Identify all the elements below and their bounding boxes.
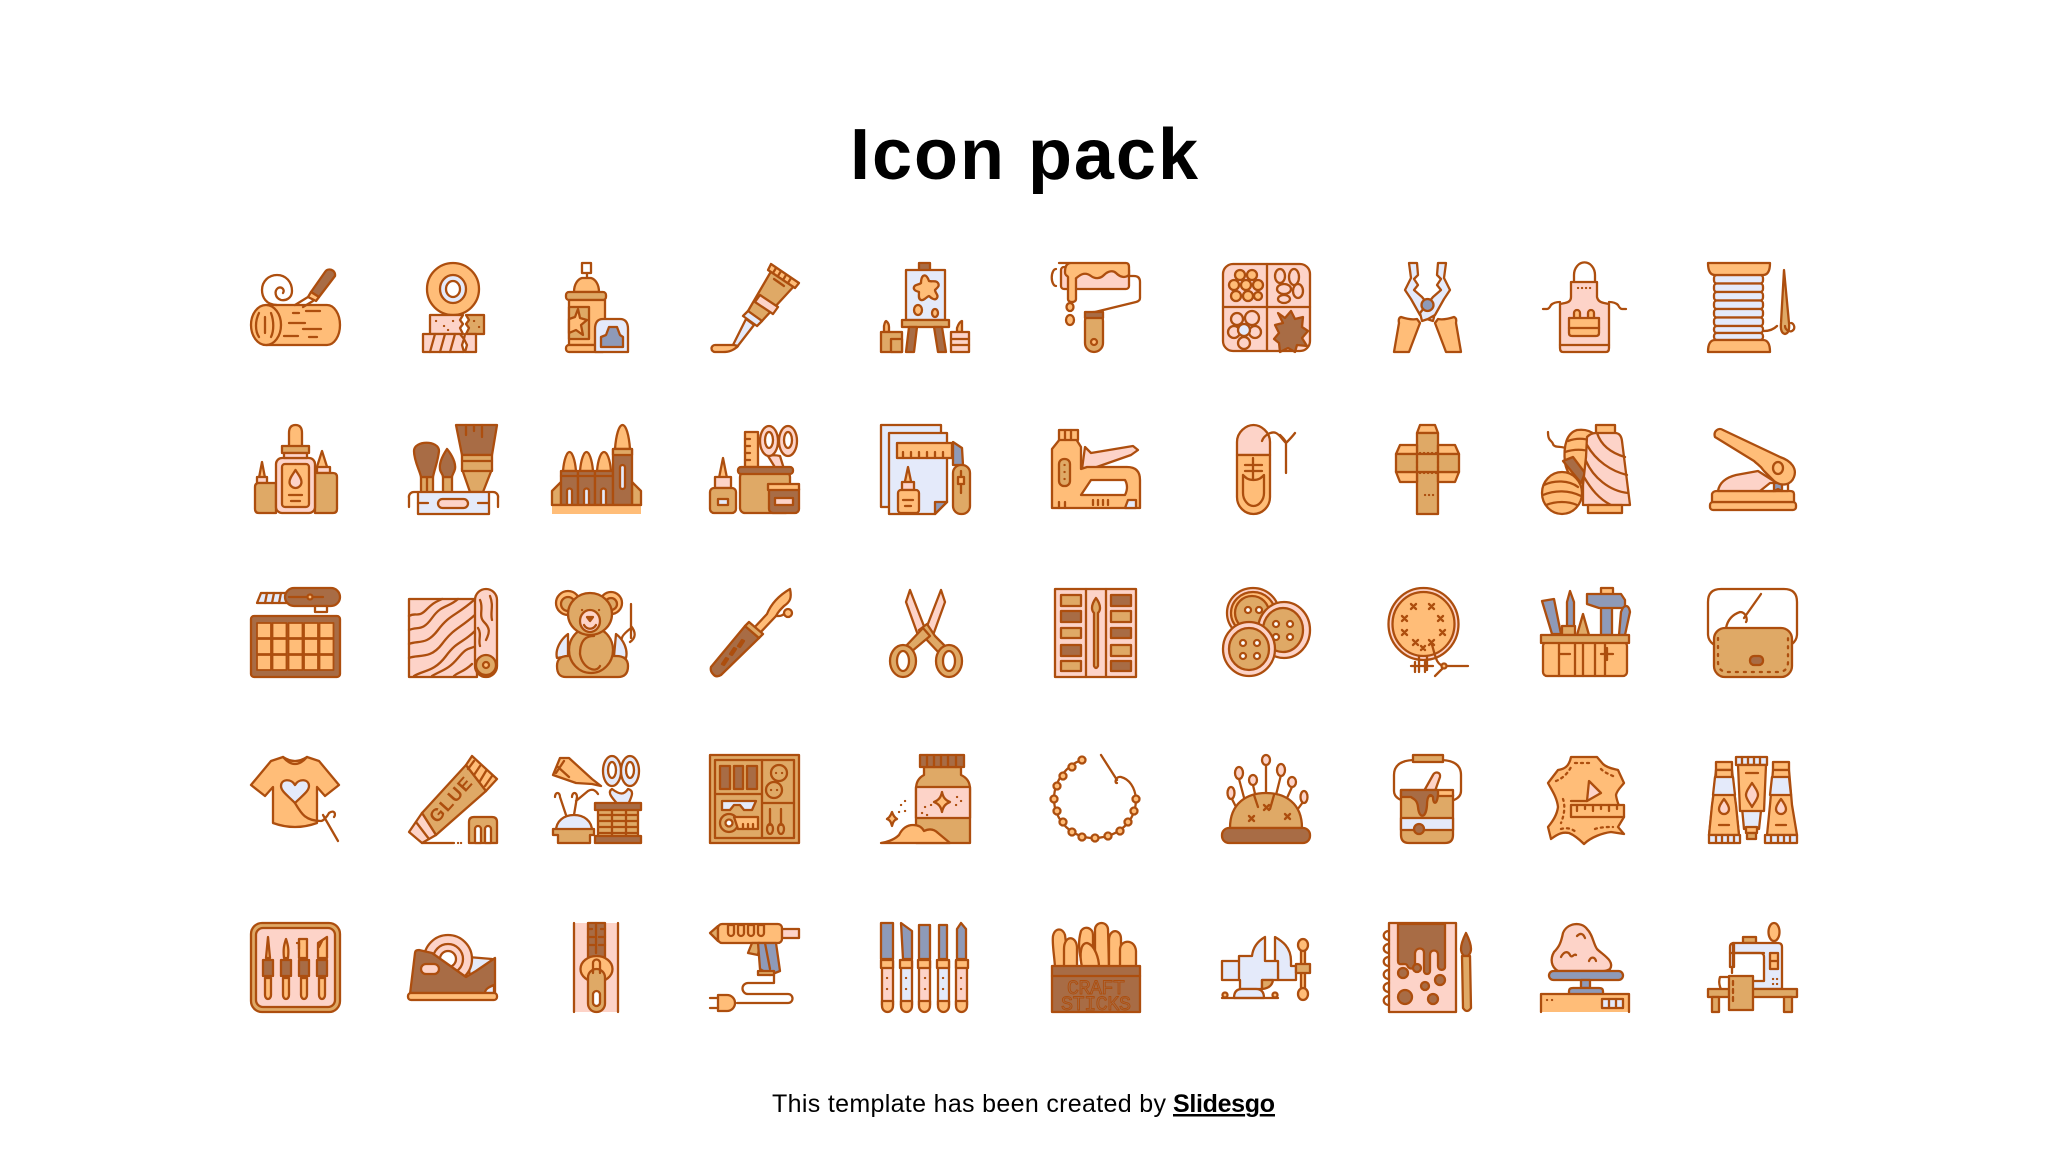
icon: carving chisels — [881, 923, 968, 1012]
icon: shoe and needle — [1237, 425, 1295, 514]
footer credit: This template has been created by — [772, 1090, 1166, 1118]
icon: thread spool and needle — [1708, 263, 1794, 352]
icon: box net — [1396, 425, 1459, 514]
icon: pliers — [1394, 263, 1461, 352]
icon: log with chisel — [251, 269, 340, 345]
icon: craft sticks box: CRAFT — [1067, 978, 1125, 1001]
icon: fabric roll — [409, 589, 497, 677]
icon: paint bucket — [1394, 755, 1461, 843]
footer credit: Slidesgo — [1173, 1090, 1275, 1118]
icon: craft box — [710, 755, 799, 843]
icon: paper and ruler — [881, 425, 970, 514]
icon: cutter and mat — [251, 588, 340, 677]
icon: apron — [1543, 262, 1626, 352]
icon: pottery wheel — [1541, 924, 1629, 1012]
icon: brushes in box — [409, 425, 498, 514]
icon: sewing set — [553, 756, 641, 843]
icon: paint tube — [712, 264, 799, 352]
icon: hole punch — [1710, 429, 1796, 510]
icon: leather bag — [1708, 589, 1797, 677]
icon: bead necklace — [1050, 755, 1140, 842]
icon: brush tray — [251, 923, 340, 1012]
icon: craft sticks box: STICKS — [1061, 994, 1131, 1017]
icon: embroidery hoop — [1388, 588, 1468, 676]
icon grid — [251, 262, 1797, 1017]
icon: glue stick: GLUE — [425, 773, 476, 827]
icon: glue gun — [710, 924, 799, 1011]
icon: craft supplies cup — [710, 426, 799, 513]
icon: leather hide — [1548, 757, 1624, 844]
icon: crayon box — [552, 425, 641, 514]
icon: tape rolls — [423, 263, 484, 352]
icon: notebook and brush — [1384, 923, 1471, 1012]
icon: seam ripper — [711, 589, 792, 676]
icon: glitter jar — [881, 755, 970, 843]
icon: easel — [881, 263, 969, 352]
icon: paint tubes — [1709, 757, 1797, 843]
icon: staple gun — [1052, 430, 1140, 508]
title: Icon pack — [850, 115, 1199, 195]
icon: spray can — [566, 263, 628, 352]
icon: pincushion — [1222, 755, 1310, 843]
icon: zipper — [574, 923, 618, 1012]
icon: glue bottles — [255, 425, 337, 513]
icon: bead tray — [1223, 264, 1310, 352]
icon: sewing machine — [1708, 923, 1797, 1012]
icon: tool caddy — [1541, 588, 1630, 676]
icon: glue stick — [409, 756, 497, 843]
icon: scissors — [890, 590, 962, 677]
icon: buttons — [1223, 588, 1310, 676]
icon: tape dispenser — [408, 935, 497, 1000]
icon: teddy bear — [556, 591, 635, 677]
icon: watercolor palette — [1055, 589, 1136, 677]
icon: bench vise — [1222, 937, 1310, 1000]
icon: paint roller — [1052, 263, 1140, 352]
icon: craft sticks box — [1052, 923, 1140, 1017]
icon: t-shirt with heart — [251, 757, 339, 841]
icon: yarn and cone — [1542, 425, 1630, 514]
